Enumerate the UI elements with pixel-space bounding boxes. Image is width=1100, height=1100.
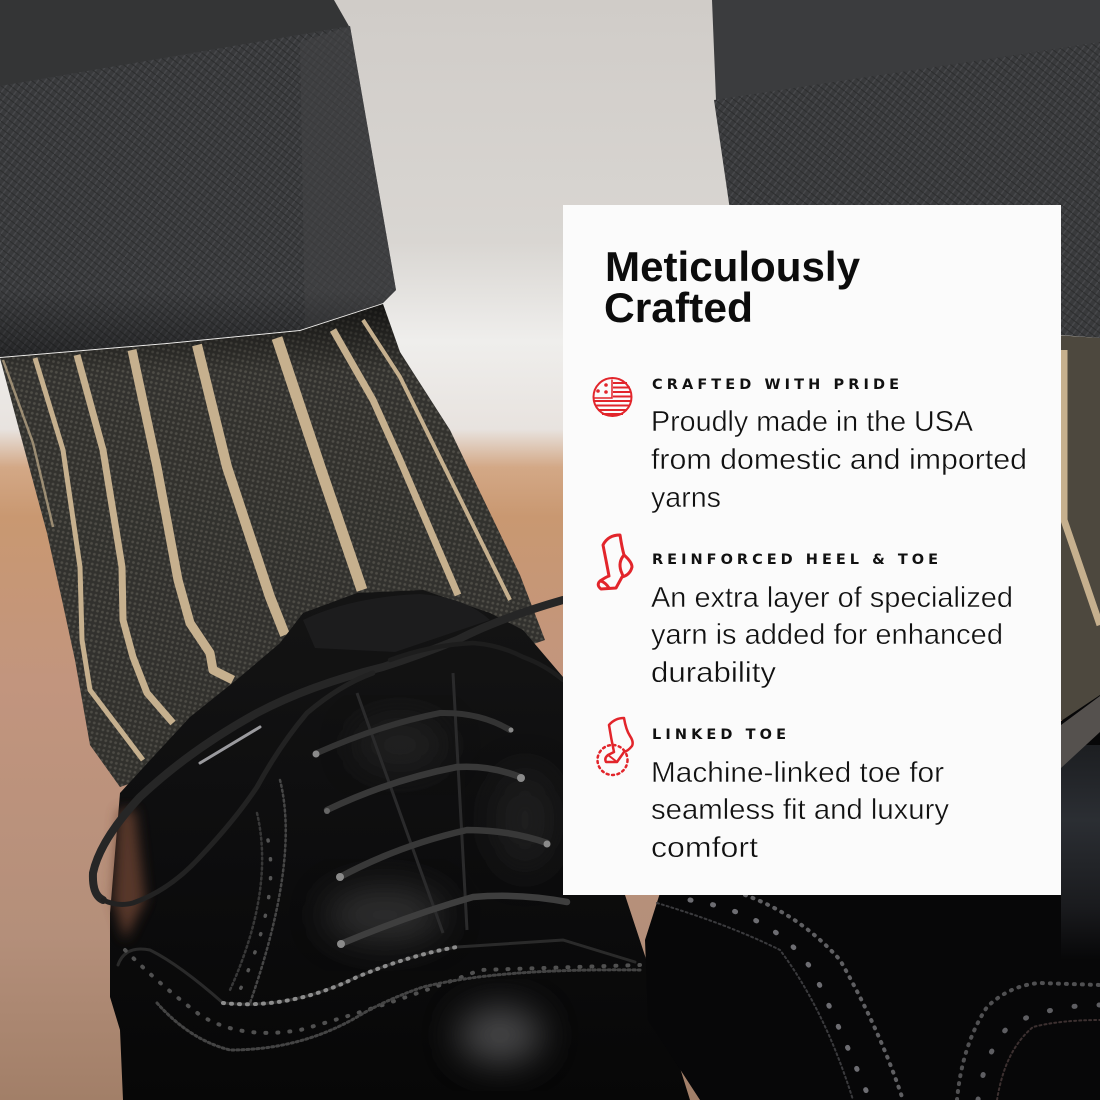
text block: reinforced heel and toe bbox=[651, 552, 1013, 689]
left black oxford shoe bbox=[110, 590, 690, 1100]
text block: crafted with pride: Proudly made in the USA bbox=[651, 406, 974, 438]
panel: meticulously crafted card bbox=[563, 205, 1061, 895]
text block: linked toe: seamless fit and luxury bbox=[651, 794, 949, 826]
right trouser leg with cuff bbox=[712, 0, 1100, 338]
right sock edge bbox=[1055, 335, 1100, 720]
text block: linked toe: Machine-linked toe for bbox=[651, 757, 944, 789]
text block: crafted with pride: CRAFTED WITH PRIDE bbox=[652, 377, 899, 393]
text block: reinforced heel and toe: An extra layer of specialized bbox=[651, 582, 1013, 614]
left striped dress sock bbox=[0, 304, 545, 787]
shoe brogue toe cap bbox=[118, 780, 640, 1050]
icon: reinforced heel and toe sock bbox=[598, 535, 632, 589]
right black shoe bbox=[645, 695, 1100, 1100]
text block: linked toe: comfort bbox=[651, 832, 758, 864]
text block: reinforced heel and toe: yarn is added for enhanced bbox=[651, 619, 1003, 651]
text block: linked toe: LINKED TOE bbox=[652, 727, 786, 743]
title: Crafted bbox=[604, 284, 753, 331]
shoelaces bbox=[93, 600, 567, 943]
icon: linked toe sock bbox=[598, 718, 633, 775]
text block: reinforced heel and toe: REINFORCED HEEL & TOE bbox=[652, 552, 938, 568]
left trouser leg with cuff bbox=[0, 0, 396, 357]
shoe eyelets bbox=[312, 728, 550, 948]
text block: crafted with pride bbox=[651, 377, 1027, 514]
shoe seams bbox=[357, 673, 467, 933]
text block: crafted with pride: yarns bbox=[651, 482, 721, 514]
icon: american flag circle bbox=[594, 378, 632, 416]
text block: reinforced heel and toe: durability bbox=[651, 657, 777, 689]
title: Meticulously bbox=[605, 243, 861, 290]
title bbox=[604, 243, 861, 331]
text block: crafted with pride: from domestic and imported bbox=[651, 444, 1027, 476]
text block: linked toe bbox=[651, 727, 949, 864]
